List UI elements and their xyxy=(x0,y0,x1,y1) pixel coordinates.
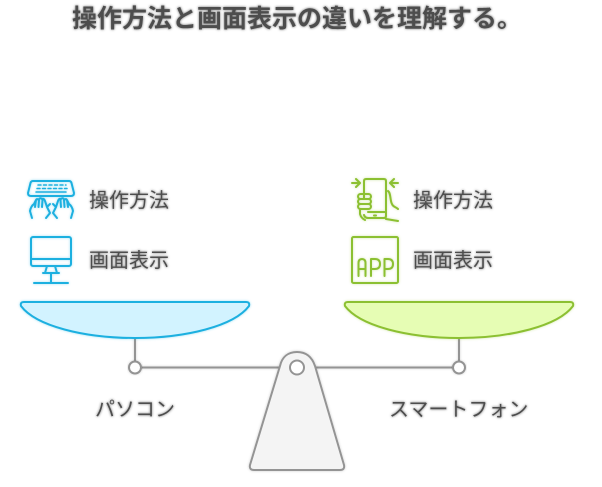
label: smartphone: スマートフォン xyxy=(389,399,528,421)
icon: app window xyxy=(352,237,398,283)
text: PC operation: 操作方法 xyxy=(89,189,169,212)
label: PC: パソコン xyxy=(95,399,175,421)
text: smartphone operation: 操作方法 xyxy=(413,189,493,212)
left pivot circle xyxy=(129,362,141,374)
fulcrum body xyxy=(250,352,344,470)
title: 操作方法と画面表示の違いを理解する。 xyxy=(72,5,522,33)
icon: monitor xyxy=(31,237,71,283)
scale beam xyxy=(135,338,459,368)
text: smartphone display: 画面表示 xyxy=(413,249,493,272)
panel: right pan xyxy=(345,302,573,338)
fulcrum hinge xyxy=(290,360,304,374)
icon: hand holding smartphone xyxy=(352,179,398,221)
scale fulcrum xyxy=(250,352,344,470)
panel: left pan xyxy=(21,302,249,338)
right pivot circle xyxy=(453,362,465,374)
text: PC display: 画面表示 xyxy=(89,249,169,272)
icon: keyboard and hands xyxy=(28,181,74,218)
